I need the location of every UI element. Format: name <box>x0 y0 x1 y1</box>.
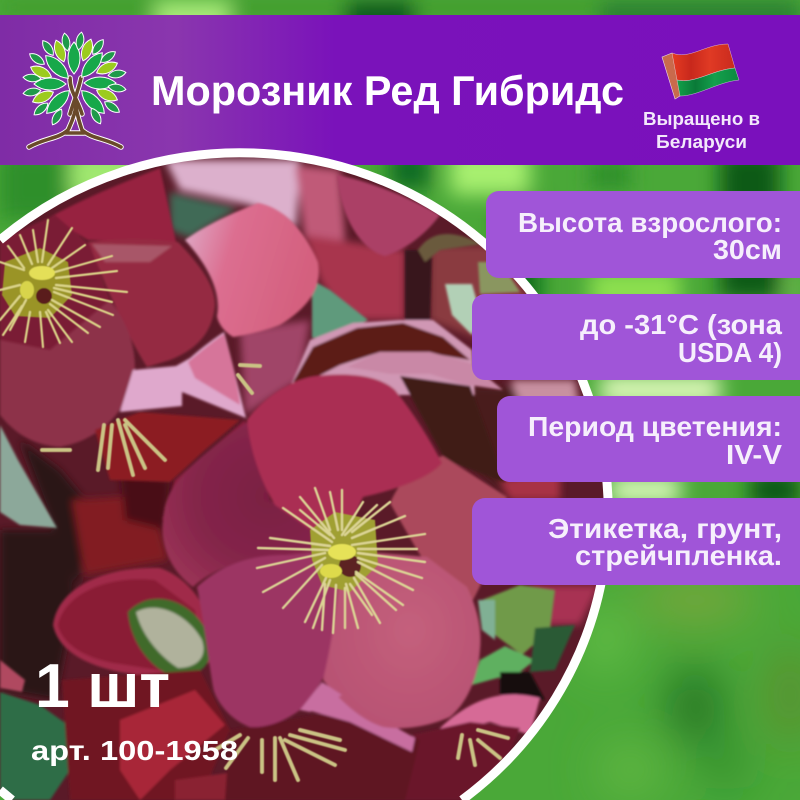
panel: flowering period <box>497 396 800 482</box>
leaves: lime <box>29 38 119 106</box>
panel: flowering period: IV-V <box>726 439 782 470</box>
caption: grown in Belarus: Беларуси <box>656 132 747 152</box>
out-of-focus petals behind <box>0 160 600 700</box>
panel: frost hardiness: до -31°C (зона <box>580 309 782 340</box>
panel: frost hardiness: USDA 4) <box>678 337 782 368</box>
panel: frost hardiness <box>472 294 800 380</box>
tree trunk and roots <box>29 78 121 147</box>
quantity label: 1 шт <box>35 652 170 721</box>
dark-rimmed petal right <box>283 320 475 395</box>
bottom red mass <box>62 670 230 800</box>
panel: height <box>486 191 800 278</box>
article number: арт. 100-1958 <box>31 735 238 766</box>
header band <box>0 15 800 165</box>
lower right petals <box>440 695 540 735</box>
leaves: outer dark <box>22 31 127 127</box>
title: Морозник Ред Гибридс <box>151 67 624 114</box>
green leaves <box>312 280 368 338</box>
icon: Belarus flag <box>662 44 739 99</box>
panel: height: Высота взрослого: <box>518 207 782 238</box>
top-right magenta petal <box>337 175 440 256</box>
lower stamens <box>42 365 508 780</box>
upper-left flower: petals <box>50 168 176 242</box>
panel: flowering period: Период цветения: <box>528 411 782 442</box>
photo: hellebore flowers in white-ringed ellipse <box>0 150 610 800</box>
caption: grown in Belarus <box>643 109 760 152</box>
main flower petals <box>390 456 507 600</box>
panel: height: 30см <box>713 234 782 265</box>
leaves: large dark green <box>34 42 116 118</box>
main flower centre <box>257 488 425 633</box>
panel: package contents <box>472 498 800 585</box>
panel: package contents: стрейчпленка. <box>575 540 782 571</box>
panel: package contents: Этикетка, грунт, <box>548 513 782 544</box>
pink petal group <box>95 412 240 482</box>
caption: grown in Belarus: Выращено в <box>643 109 760 129</box>
upper-left flower centre <box>0 220 127 347</box>
bottom-centre flower <box>225 710 420 800</box>
lower-left bud <box>53 568 215 680</box>
logo: tree <box>22 31 127 147</box>
white ring <box>0 153 608 800</box>
dark stem <box>405 250 432 322</box>
